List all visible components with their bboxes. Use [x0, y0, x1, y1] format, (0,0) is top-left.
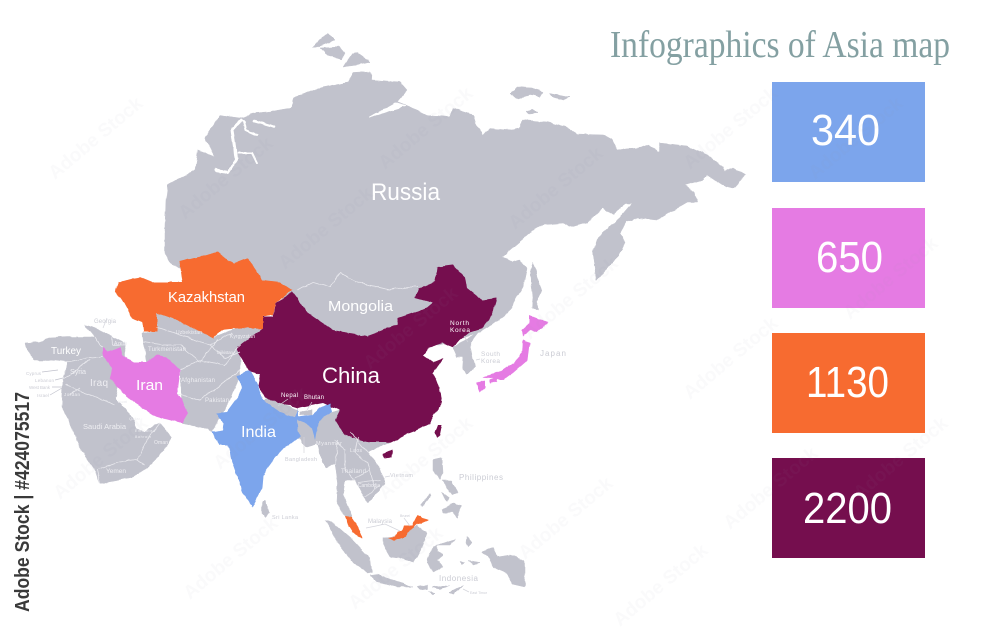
- watermark: [45, 83, 953, 627]
- legend box: 1130: 1130: [806, 358, 889, 407]
- label: small country names on grey: Iraq: [90, 378, 108, 389]
- leader lines: [42, 318, 480, 592]
- label: grey country names on white: Philippines: [459, 473, 503, 482]
- label: small country names on grey: [64, 330, 380, 489]
- label: turkey: Turkey: [51, 346, 81, 357]
- sumatra: [325, 520, 372, 573]
- watermark: Adobe Stock: [805, 93, 908, 184]
- label: grey country names on white: Bangladesh: [285, 457, 317, 463]
- label: china: China: [322, 363, 381, 388]
- label: small country names on grey: Bahrain: [135, 435, 151, 439]
- legend box: 2200: 2200: [803, 484, 892, 533]
- sulawesi: [427, 539, 455, 573]
- label: kazakhstan: Kazakhstan: [168, 289, 245, 306]
- japan: [477, 315, 548, 393]
- label: grey country names on white: Lebanon: [35, 378, 54, 383]
- watermark: Adobe Stock: [45, 93, 148, 184]
- watermark: Adobe Stock: [375, 83, 478, 174]
- arctic gulfs of russia: [216, 103, 405, 172]
- watermark: Adobe Stock: [175, 133, 278, 224]
- label: small country names on grey: Kyrgyzstan: [230, 334, 255, 340]
- label: grey country names on white: Vietnam: [390, 473, 413, 479]
- watermark: Adobe Stock: [505, 143, 608, 234]
- label: small country names on grey: Syria: [70, 367, 87, 376]
- label: small country names on grey: Myanmar: [316, 441, 342, 447]
- label: white names on china: North: [450, 320, 469, 327]
- label: small country names on grey: Pakistan: [205, 398, 229, 404]
- watermark: Adobe Stock: [680, 313, 783, 404]
- arctic islands: [313, 33, 570, 114]
- label: iran: Iran: [136, 377, 163, 394]
- watermark: Adobe Stock: [345, 523, 448, 614]
- sakhalin: [530, 262, 542, 310]
- legend box: 340: [772, 82, 925, 182]
- label: grey country names on white: South: [481, 351, 500, 358]
- hainan: [383, 450, 392, 458]
- label: small country names on grey: Kuwait: [118, 399, 128, 404]
- label: grey country names on white: Georgia: [94, 319, 117, 325]
- kazakhstan: [115, 252, 292, 338]
- label: small country names on grey: Qatar: [129, 416, 141, 421]
- moluccas: [460, 537, 480, 565]
- label: small country names on grey: Yemen: [106, 468, 126, 475]
- legend box: 1130: [772, 333, 925, 433]
- watermark: Adobe Stock: [680, 83, 783, 174]
- label: small country names on grey: Cambodia: [358, 483, 380, 489]
- southeast asia mainland: [298, 410, 390, 520]
- watermark: Adobe Stock: [180, 513, 283, 604]
- iran: [103, 347, 188, 423]
- labels on map: [26, 179, 566, 595]
- label: white names on china: Nepal: [281, 393, 298, 399]
- label: small country names on grey: Laos: [350, 448, 362, 454]
- label: grey country names on white: Cyprus: [26, 371, 42, 376]
- central and south asia: [142, 313, 270, 432]
- label: white names on china: Korea: [450, 327, 470, 334]
- label: grey country names on white: Sri Lanka: [272, 515, 299, 521]
- watermark: Adobe Stock: [720, 443, 823, 534]
- label: mongolia: Mongolia: [328, 298, 394, 315]
- watermark: Adobe Stock: [275, 183, 378, 274]
- label: small country names on grey: Turkmenistan: [148, 347, 186, 353]
- label: small country names on grey: Saudi Arabia: [83, 422, 127, 431]
- watermark: Adobe Stock: [520, 253, 623, 344]
- label: grey country names on white: Israel: [37, 393, 49, 398]
- new guinea: [482, 548, 525, 587]
- malaysia: [345, 515, 429, 541]
- java and lesser sunda islands: [370, 574, 463, 595]
- china: [237, 265, 497, 458]
- label: small country names on grey: Thailand: [341, 469, 366, 475]
- map: grey countries: [25, 33, 745, 595]
- label: white names on china: [281, 320, 470, 401]
- watermark: Adobe Stock: [515, 473, 618, 564]
- watermark: Adobe Stock: [840, 233, 943, 324]
- label: small country names on grey: Azerb: [114, 341, 127, 347]
- label: grey country names on white: Japan: [540, 349, 566, 358]
- label: grey country names on white: [26, 319, 566, 595]
- watermark: Adobe Stock: [50, 413, 153, 504]
- label: small country names on grey: Uzbekistan: [176, 330, 202, 336]
- asia map: [25, 33, 745, 595]
- india: [212, 371, 332, 507]
- label: small country names on grey: Jordan: [64, 392, 80, 397]
- label: grey country names on white: West Bank: [29, 385, 51, 390]
- land shapes: [25, 33, 745, 595]
- label: grey country names on white: Brunei: [400, 514, 410, 518]
- label: russia: Russia: [371, 179, 441, 206]
- nepal: [263, 397, 297, 417]
- philippines: [421, 458, 462, 518]
- taiwan: [435, 425, 442, 438]
- sri lanka: [262, 500, 269, 517]
- label: grey country names on white: Malaysia: [368, 519, 393, 525]
- watermark: Adobe Stock: [210, 383, 313, 474]
- watermark: Adobe Stock: [375, 413, 478, 504]
- legend box: 2200: [772, 458, 925, 558]
- label: white names on china: Bhutan: [304, 395, 324, 401]
- bangladesh: [297, 420, 315, 448]
- borneo: [383, 525, 427, 563]
- label: grey country names on white: Korea: [481, 358, 500, 365]
- label: small country names on grey: Afghanistan: [181, 378, 215, 384]
- title: Infographics of Asia map: [610, 24, 950, 66]
- country borders: [62, 273, 418, 497]
- korea: [453, 330, 480, 375]
- watermark: Adobe Stock: [850, 413, 953, 504]
- stock id vertical text: Adobe Stock | #424075517: [12, 392, 34, 612]
- label: grey country names on white: East Timor: [470, 591, 488, 595]
- label: india: India: [241, 424, 276, 441]
- label: small country names on grey: Emirates: [135, 429, 155, 433]
- watermark: Adobe Stock: [360, 283, 463, 374]
- russia: [165, 72, 745, 345]
- west asia: [25, 325, 172, 483]
- legend box: 650: [772, 208, 925, 308]
- legend box: 340: 340: [811, 106, 880, 155]
- bhutan: [300, 410, 312, 415]
- label: grey country names on white: Indonesia: [439, 574, 479, 583]
- legend box: 650: 650: [816, 233, 883, 282]
- mongolia: [290, 285, 440, 340]
- label: small country names on grey: Oman: [154, 440, 168, 446]
- label: small country names on grey: Tajikistan: [216, 350, 233, 355]
